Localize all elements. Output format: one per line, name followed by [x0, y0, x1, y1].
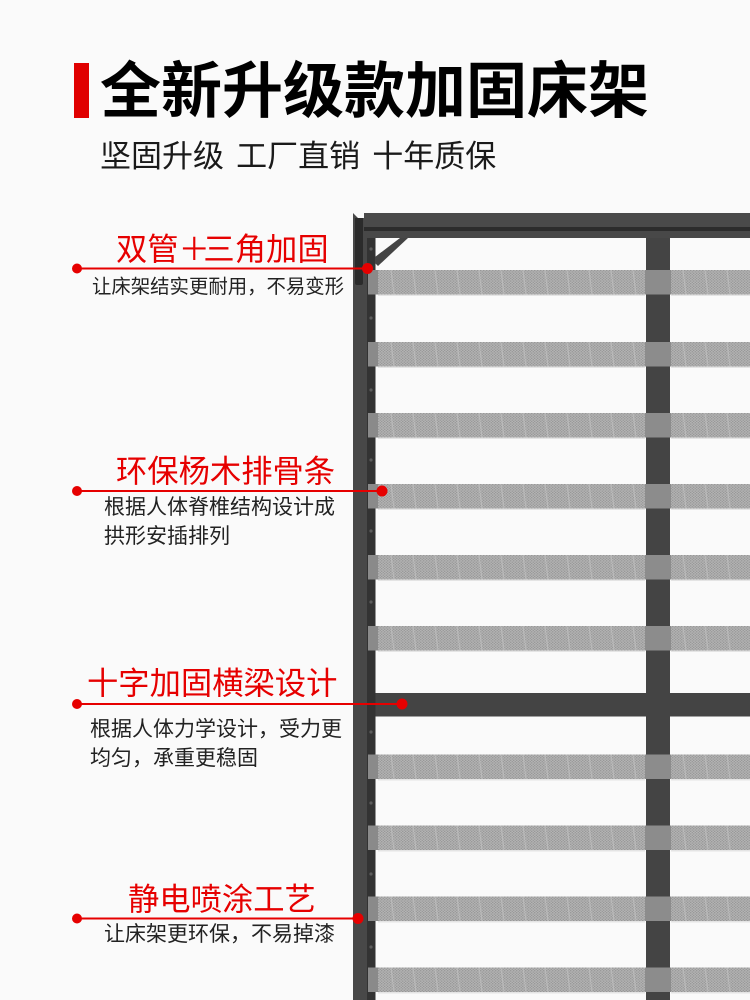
leader line: cross beam: [72, 698, 408, 710]
leader line: double tube: [72, 263, 373, 274]
slats: [368, 270, 750, 994]
frame: cross beam: [367, 693, 750, 716]
subtitle: 坚固升级 工厂直销 十年质保: [100, 139, 496, 174]
frame: rivets: [369, 247, 373, 949]
callout text: cross beam: [90, 718, 342, 770]
callout heading: coating: 静电喷涂工艺: [128, 882, 316, 917]
frame: top beam: [364, 213, 750, 238]
frame: left post: [353, 213, 367, 1000]
callout text: poplar slats: [104, 496, 335, 548]
callout heading: poplar slats: 环保杨木排骨条: [116, 454, 335, 489]
callout text: cross beam: 根据人体力学设计，受力更: [90, 718, 342, 741]
title: 全新升级款加固床架: [100, 57, 649, 125]
frame: triangle brace: [375, 238, 408, 266]
callout text: coating: 让床架更环保，不易掉漆: [104, 923, 335, 946]
frame: center post: [646, 231, 670, 1000]
frame: post bracket: [355, 218, 363, 285]
title accent bar: [74, 63, 89, 118]
callout text: poplar slats: 根据人体脊椎结构设计成: [104, 496, 335, 519]
frame: inner rail: [367, 228, 376, 1000]
callout text: double tube: 让床架结实更耐用，不易变形: [92, 276, 344, 298]
callout heading: double tube: 双管＋三角加固: [116, 232, 329, 267]
leader line: poplar slats: [72, 486, 388, 496]
leader line: coating: [72, 913, 364, 924]
callout text: cross beam: 均匀，承重更稳固: [90, 747, 258, 770]
callout heading: cross beam: 十字加固横梁设计: [87, 666, 337, 701]
callout text: poplar slats: 拱形安插排列: [104, 525, 230, 548]
